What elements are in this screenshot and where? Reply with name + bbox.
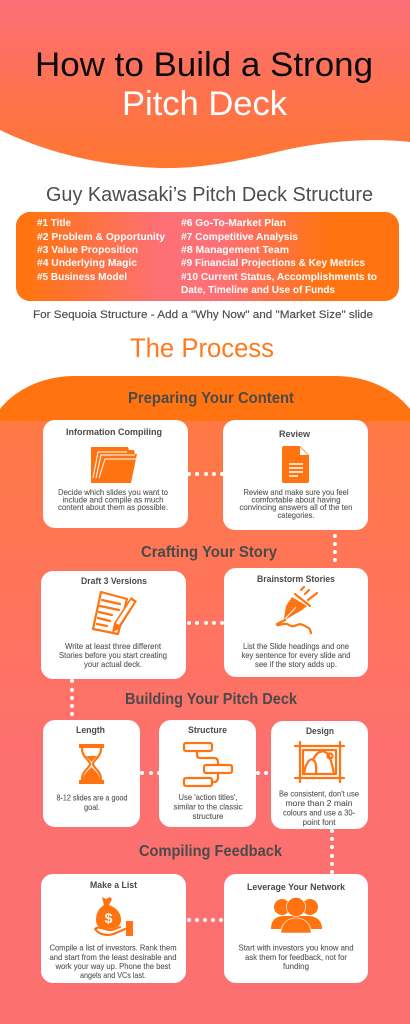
body text: Start with investors you know and [238,942,354,952]
card: information compiling [43,420,188,528]
slide list column two: #10 Current Status, Accomplishments to [181,271,377,283]
slide list column one: #3 Value Proposition [37,244,138,256]
card: make a list: Make a List [90,880,138,891]
card: draft 3 versions [41,571,186,679]
card: make a list: work your way up. Phone the best [55,961,171,971]
body text: Compile a list of investors. Rank them [50,942,176,952]
slide list column two: #7 Competitive Analysis [181,231,298,243]
card: make a list: and start from the least desirable and [50,952,177,962]
card: structure: similar to the classic [174,802,243,812]
title: How to Build a Strong [35,46,373,84]
section heading: crafting your story: Crafting Your Story [141,544,277,561]
process background [0,376,410,1024]
title: Pitch Deck [122,85,288,123]
icon: people group [271,898,322,933]
body text: Decide which slides you want to [58,487,168,497]
card: review [223,420,368,530]
section heading: preparing your content: Preparing Your Content [128,390,294,407]
card: design: point font [302,817,336,827]
card: leverage your network: Leverage Your Network [247,882,346,893]
icon: money bag in hand: $ [105,910,113,926]
card: draft 3 versions: Draft 3 Versions [81,576,147,587]
card: information compiling: Information Compiling [66,427,162,438]
card: structure: structure [192,811,224,821]
slide list column two: Date, Timeline and Use of Funds [181,284,335,296]
card: brainstorm stories: see if the story adds up. [255,659,337,669]
icon: flow chart [184,743,232,786]
card: structure [159,720,256,827]
connector dots [70,472,337,922]
note: sequoia: For Sequoia Structure - Add a "Why Now" and "Market Size" slide [33,309,373,321]
card: leverage your network: ask them for feedback, not for [245,952,347,962]
card: length: goal. [84,802,100,812]
slide list column one: #4 Underlying Magic [37,257,137,269]
card: brainstorm stories: Brainstorm Stories [257,574,335,585]
body text: 8-12 slides are a good [56,792,128,802]
card: information compiling: content about them as possible. [58,502,168,512]
section heading: building your pitch deck: Building Your Pitch Deck [125,691,297,708]
heading: structure: Guy Kawasaki’s Pitch Deck Structure [46,184,373,206]
icon: folder [91,447,137,483]
card: structure: Structure [188,725,227,736]
card: design: more than 2 main [286,798,353,808]
icon: paper and pencil [93,592,137,634]
icon: money bag in hand [95,897,133,936]
slide list column one: #2 Problem & Opportunity [37,231,165,243]
header wave background [0,0,410,168]
slide list column one: #5 Business Model [37,271,127,283]
card: review: comfortable about having [252,494,341,504]
card: review: convincing answers all of the ten [240,502,353,512]
section heading: compiling feedback: Compiling Feedback [139,843,282,860]
card: information compiling: include and compile as much [62,494,164,504]
card: review: Review [279,429,311,440]
heading: the process: The Process [130,333,274,363]
slide list column two: #8 Management Team [181,244,289,256]
body text: List the Slide headings and one [243,641,349,651]
body text: Use 'action titles', [178,792,238,802]
card: length [43,720,140,827]
slide list column one [37,217,165,283]
card: brainstorm stories: key sentence for every slide and [242,650,351,660]
icon: hourglass [79,744,104,784]
body text: Review and make sure you feel [244,487,349,497]
card: draft 3 versions: your actual deck. [84,659,142,669]
icon: fountain pen [277,587,317,633]
card: design: colours and use a 30- [283,808,355,818]
panel: slide list [16,212,399,301]
slide list column two: #9 Financial Projections & Key Metrics [181,257,365,269]
card: leverage your network [224,874,368,983]
card: review: categories. [278,510,314,520]
slide list column two [181,217,377,296]
card: leverage your network: funding [283,961,309,971]
card: design: Design [306,726,334,737]
icon: picture frame [295,742,344,782]
body text: Be consistent, don't use [279,788,359,798]
card: length: Length [76,725,105,736]
card: draft 3 versions: Stories before you start creating [59,650,167,660]
slide list column one: #1 Title [37,217,71,229]
card: brainstorm stories [224,568,368,677]
slide list column two: #6 Go-To-Market Plan [181,217,286,229]
title [35,46,373,123]
icon: document [282,446,309,483]
card: make a list [41,874,186,983]
body text: Write at least three different [65,641,162,651]
card: design [271,721,368,829]
card: make a list: angels and VCs last. [80,970,146,980]
